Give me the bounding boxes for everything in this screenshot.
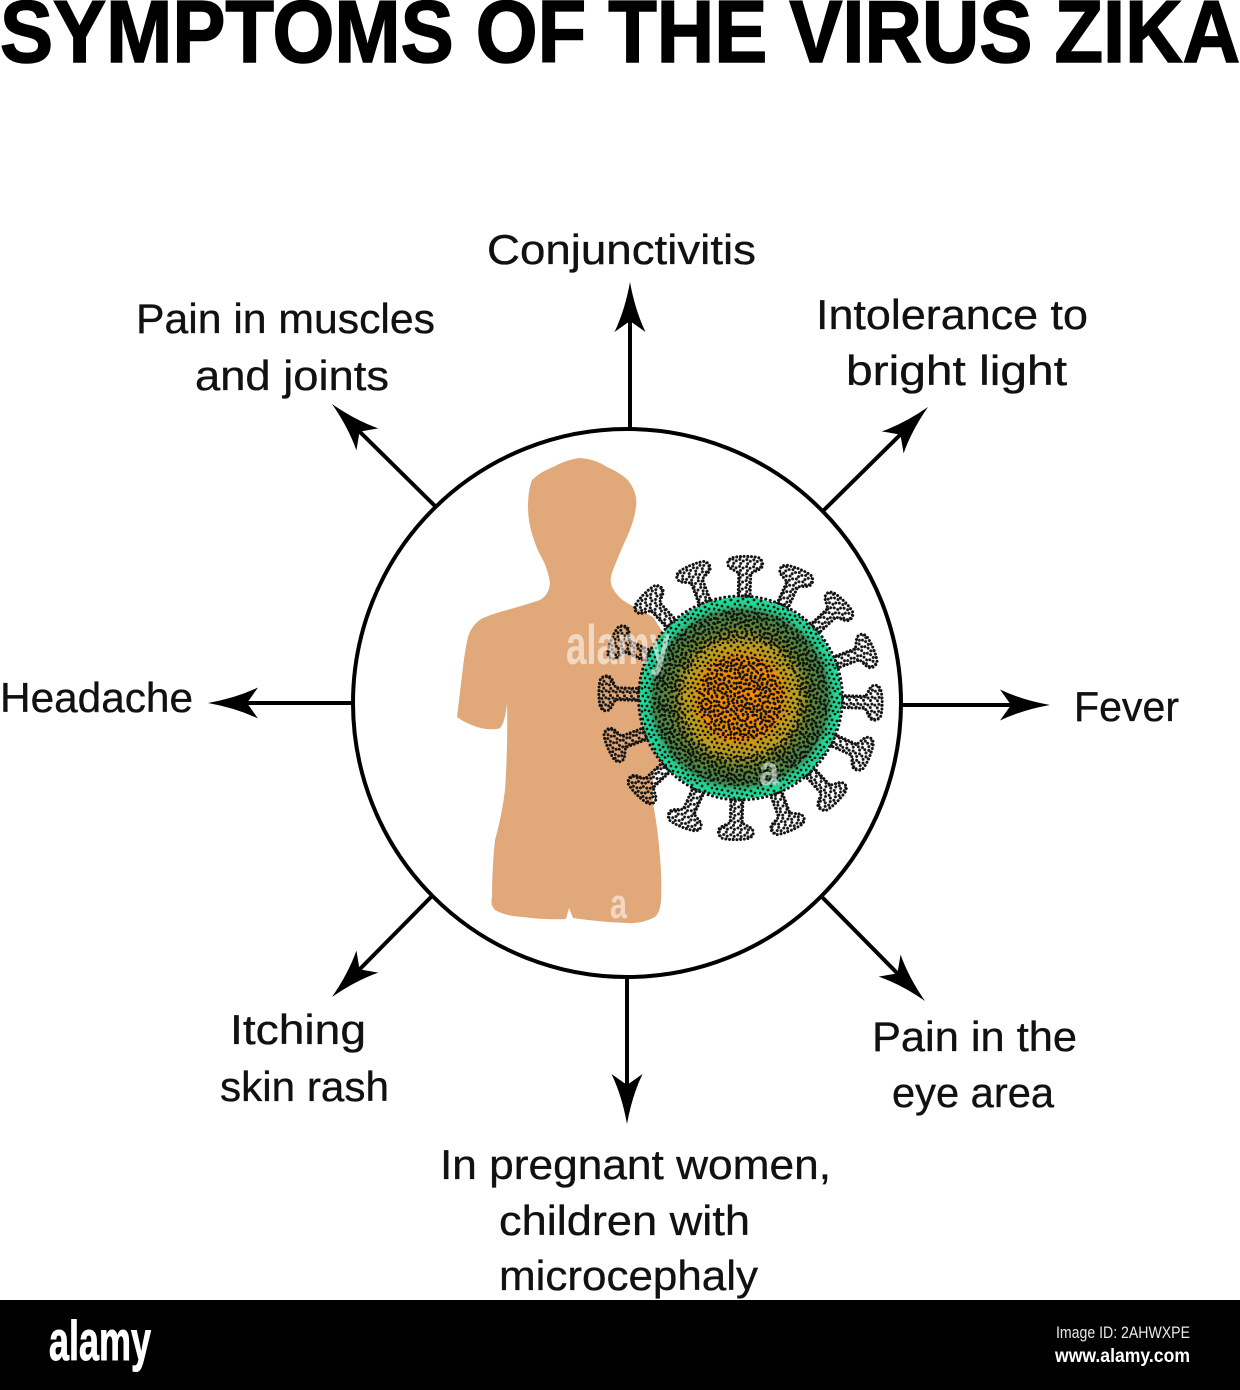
label: pain in muscles and joints: Pain in muscles	[136, 295, 435, 342]
label: fever: Fever	[1074, 683, 1179, 730]
label: pain in the eye area: Pain in the	[872, 1013, 1077, 1060]
label: pain in muscles and joints	[136, 295, 435, 399]
label: intolerance to bright light: Intolerance to	[816, 291, 1088, 338]
arrow: east to fever	[902, 690, 1050, 720]
label: itching skin rash	[220, 1006, 389, 1110]
label: pain in the eye area: eye area	[892, 1069, 1055, 1116]
dotted rim	[638, 596, 842, 800]
label: pain in the eye area	[872, 1013, 1077, 1116]
label: headache: Headache	[0, 674, 193, 721]
arrow: west to headache	[208, 688, 352, 718]
virus core with coloured rings	[640, 597, 842, 799]
arrow: south-east to pain in the eye area	[822, 897, 936, 1012]
label: intolerance to bright light	[816, 291, 1088, 394]
dense outer dark ring	[653, 610, 829, 786]
watermark overlay: alamy	[566, 613, 670, 676]
arrow: up to conjunctivitis	[614, 282, 646, 428]
icon: virus	[598, 556, 883, 840]
label: in pregnant women, children with microcephaly: microcephaly	[499, 1252, 758, 1299]
arrow: south to pregnant women	[612, 978, 642, 1124]
footer logo: alamy	[49, 1309, 151, 1372]
label: in pregnant women, children with microcephaly: In pregnant women,	[440, 1141, 831, 1188]
watermark overlay: a	[759, 747, 780, 794]
arrow: north-west to pain in muscles and joints	[321, 393, 435, 506]
label: conjunctivitis: Conjunctivitis	[487, 226, 756, 273]
arrow: north-east to intolerance to bright light	[823, 396, 939, 511]
label: itching skin rash: Itching	[230, 1006, 366, 1053]
image id: Image ID: 2AHWXPE	[1056, 1323, 1190, 1342]
website: www.alamy.com	[1054, 1346, 1190, 1367]
arrow: south-west to itching skin rash	[321, 896, 432, 1008]
label: in pregnant women, children with microcephaly	[440, 1141, 831, 1299]
label: pain in muscles and joints: and joints	[195, 352, 389, 399]
virus spikes	[598, 556, 883, 840]
human body silhouette	[457, 458, 670, 923]
label: itching skin rash: skin rash	[220, 1063, 389, 1110]
footer bar	[0, 1300, 1240, 1390]
central circle	[353, 429, 901, 977]
dense inner orange dots	[698, 655, 784, 741]
watermark overlay	[566, 613, 780, 927]
label: intolerance to bright light: bright light	[846, 347, 1067, 394]
label: in pregnant women, children with microcephaly: children with	[499, 1197, 750, 1244]
watermark overlay: a	[610, 880, 627, 927]
base dot texture	[640, 597, 842, 799]
